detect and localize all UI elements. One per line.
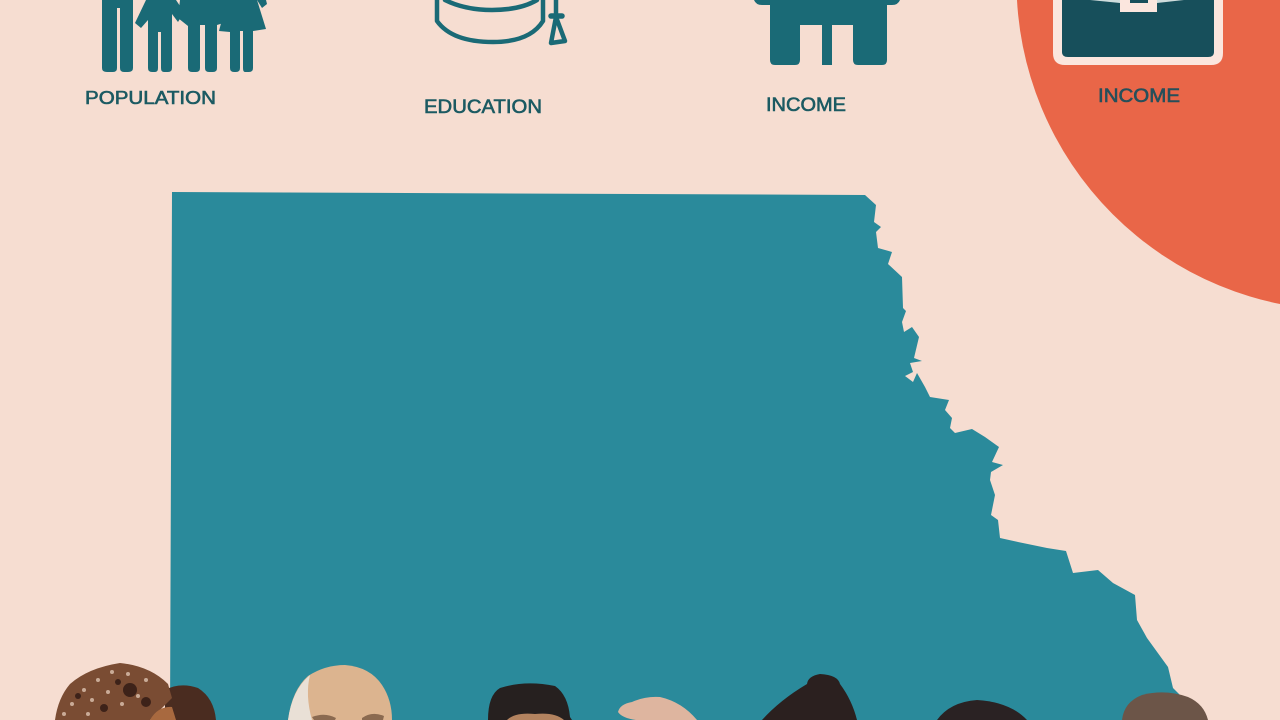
- person 7: brown hair: [1122, 692, 1208, 720]
- photo: group of people along the bottom edge: [55, 663, 1208, 720]
- label: income on circle: INCOME: [1098, 86, 1180, 107]
- icon: people: [102, 0, 267, 72]
- person 2: bald head: [288, 665, 392, 720]
- label: population: POPULATION: [85, 88, 216, 108]
- person 3: short dark hair: [488, 683, 572, 720]
- person 4: raised hand: [618, 697, 697, 720]
- person 1: curly hair: [55, 663, 216, 720]
- label: education: EDUCATION: [424, 97, 542, 118]
- icon: briefcase: [1053, 0, 1223, 65]
- orange corner circle: [1016, 0, 1280, 310]
- map shape: [170, 192, 1190, 720]
- person 5: hair bun: [762, 674, 857, 720]
- icon: house: [754, 0, 900, 65]
- person 6: dark hair: [937, 700, 1027, 720]
- label: income: INCOME: [766, 95, 846, 116]
- icon: graduation cap: [437, 0, 565, 43]
